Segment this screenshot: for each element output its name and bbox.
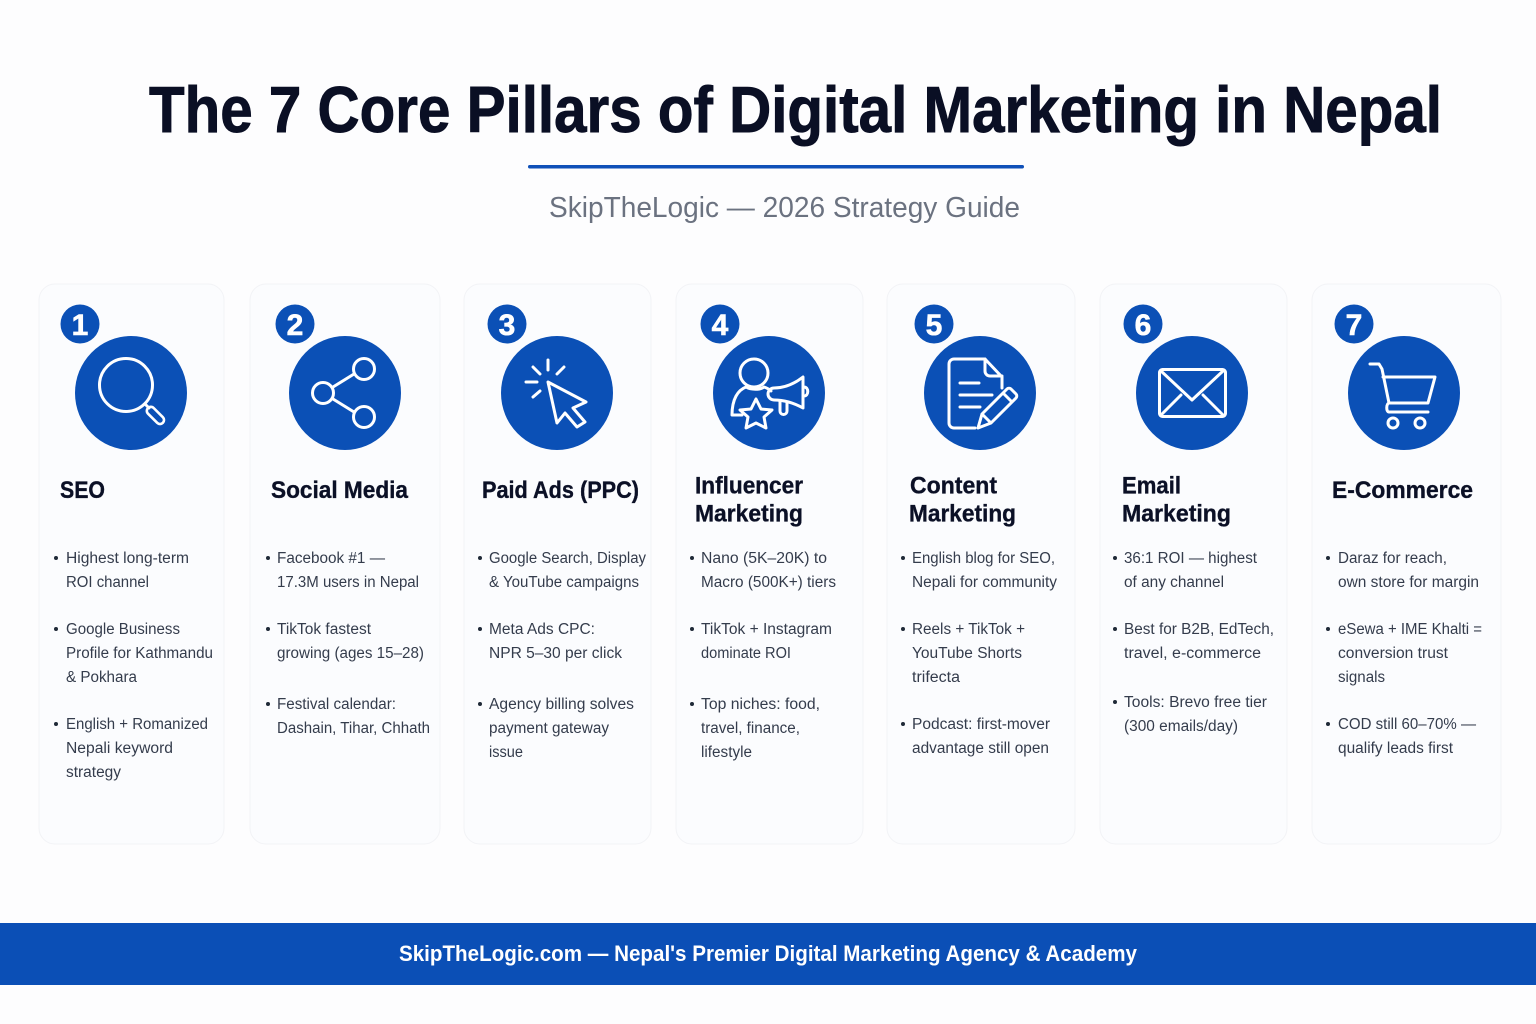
bullet list: Content Marketing bbox=[901, 550, 1057, 757]
heading: Content Marketing bbox=[909, 472, 1016, 528]
heading: Content Marketing: Content bbox=[910, 472, 997, 500]
bullet list: Content Marketing: YouTube Shorts bbox=[912, 645, 1022, 662]
badge: 6 bbox=[1124, 304, 1162, 344]
badge: 1: 1 bbox=[72, 309, 88, 342]
bullet list: Content Marketing: Podcast: first-mover bbox=[912, 716, 1050, 733]
bullet list: Social Media: Festival calendar: bbox=[277, 696, 396, 713]
bullet list: SEO: strategy bbox=[66, 764, 121, 781]
badge: 5: 5 bbox=[926, 309, 942, 342]
title underline bbox=[528, 165, 1024, 168]
heading: Email Marketing: Email bbox=[1122, 472, 1181, 500]
panel: Influencer Marketing bbox=[676, 284, 863, 844]
bullet list: Influencer Marketing: dominate ROI bbox=[701, 645, 791, 662]
bullet list: Paid Ads: issue bbox=[489, 744, 523, 761]
icon: influencer with megaphone and star bbox=[713, 336, 825, 450]
bullet list: E-Commerce: eSewa + IME Khalti = bbox=[1338, 621, 1482, 638]
panel: Paid Ads bbox=[464, 284, 651, 844]
bullet list: SEO: Google Business bbox=[66, 621, 180, 638]
bullet list: Email Marketing: Tools: Brevo free tier bbox=[1124, 694, 1267, 711]
bullet list: Influencer Marketing: TikTok + Instagram bbox=[701, 621, 832, 638]
bullet list: Email Marketing bbox=[1113, 550, 1274, 735]
bullet list: Content Marketing: English blog for SEO, bbox=[912, 550, 1055, 567]
badge: 1 bbox=[60, 304, 100, 344]
bullet list: E-Commerce bbox=[1326, 550, 1482, 757]
bullet list: Email Marketing: (300 emails/day) bbox=[1124, 718, 1238, 735]
heading: Influencer Marketing: Marketing bbox=[695, 500, 803, 528]
heading: SEO: SEO bbox=[60, 477, 105, 504]
heading: Content Marketing: Marketing bbox=[909, 500, 1016, 528]
bullet list: Social Media: Facebook #1 — bbox=[277, 550, 385, 567]
bullet list: Social Media: Dashain, Tihar, Chhath bbox=[277, 720, 430, 737]
bullet list: Influencer Marketing: Nano (5K–20K) to bbox=[701, 550, 827, 567]
bullet list: Content Marketing: advantage still open bbox=[912, 740, 1049, 757]
badge: 2 bbox=[276, 304, 314, 344]
bullet list: Paid Ads bbox=[478, 550, 646, 761]
bullet list: SEO: & Pokhara bbox=[66, 669, 137, 686]
bullet list: Social Media: 17.3M users in Nepal bbox=[277, 574, 419, 591]
badge: 5 bbox=[914, 304, 954, 344]
bullet list: E-Commerce: signals bbox=[1338, 669, 1385, 686]
icon: shopping cart bbox=[1348, 336, 1460, 450]
heading: Email Marketing bbox=[1122, 472, 1231, 528]
subtitle: SkipTheLogic — 2026 Strategy Guide bbox=[549, 192, 1020, 224]
bullet list: SEO bbox=[54, 550, 213, 781]
badge: 7 bbox=[1334, 304, 1374, 344]
bullet list: Content Marketing: Nepali for community bbox=[912, 574, 1057, 591]
heading: Influencer Marketing: Influencer bbox=[695, 472, 803, 500]
bullet list: Influencer Marketing: Top niches: food, bbox=[701, 696, 820, 713]
heading: E-Commerce: E-Commerce bbox=[1332, 477, 1473, 504]
bullet list: E-Commerce: Daraz for reach, bbox=[1338, 550, 1447, 567]
heading: Social Media: Social Media bbox=[271, 477, 409, 504]
bullet list: Paid Ads: Meta Ads CPC: bbox=[489, 621, 595, 638]
bullet list: Social Media: growing (ages 15–28) bbox=[277, 645, 424, 662]
bullet list: Influencer Marketing bbox=[690, 550, 836, 761]
panel: E-Commerce bbox=[1312, 284, 1501, 844]
bullet list: E-Commerce: own store for margin bbox=[1338, 574, 1479, 591]
panel: Social Media bbox=[250, 284, 440, 844]
footer text: SkipTheLogic.com — Nepal's Premier Digital Marketing Agency & Academy bbox=[399, 941, 1138, 966]
bullet list: Email Marketing: travel, e-commerce bbox=[1124, 645, 1261, 662]
icon: cursor click bbox=[501, 336, 613, 450]
bullet list: SEO: Nepali keyword bbox=[66, 740, 173, 757]
badge: 3 bbox=[488, 304, 526, 344]
bullet list: Influencer Marketing: Macro (500K+) tiers bbox=[701, 574, 836, 591]
bullet list: Influencer Marketing: travel, finance, bbox=[701, 720, 800, 737]
badge: 7: 7 bbox=[1346, 309, 1362, 342]
bullet list: SEO: ROI channel bbox=[66, 574, 149, 591]
bullet list: Influencer Marketing: lifestyle bbox=[701, 744, 752, 761]
heading: Paid Ads (PPC): Paid Ads (PPC) bbox=[482, 477, 639, 504]
bullet list: Content Marketing: trifecta bbox=[912, 669, 960, 686]
bullet list: SEO: Highest long-term bbox=[66, 550, 189, 567]
heading: Influencer Marketing bbox=[695, 472, 803, 528]
bullet list: Social Media bbox=[266, 550, 430, 737]
icon: envelope bbox=[1136, 336, 1248, 450]
bullet list: Email Marketing: 36:1 ROI — highest bbox=[1124, 550, 1258, 567]
footer banner bbox=[0, 923, 1536, 985]
panel: SEO bbox=[39, 284, 224, 844]
badge: 4 bbox=[700, 304, 740, 344]
bullet list: Social Media: TikTok fastest bbox=[277, 621, 372, 638]
badge: 6: 6 bbox=[1135, 309, 1151, 342]
bullet list: Paid Ads: payment gateway bbox=[489, 720, 609, 737]
bullet list: Content Marketing: Reels + TikTok + bbox=[912, 621, 1025, 638]
panel: Content Marketing bbox=[887, 284, 1075, 844]
badge: 4: 4 bbox=[712, 309, 729, 342]
bullet list: SEO: Profile for Kathmandu bbox=[66, 645, 213, 662]
icon: magnifying glass bbox=[75, 336, 187, 450]
bullet list: E-Commerce: qualify leads first bbox=[1338, 740, 1454, 757]
bullet list: Paid Ads: Agency billing solves bbox=[489, 696, 634, 713]
bullet list: Paid Ads: Google Search, Display bbox=[489, 550, 646, 567]
icon: share bbox=[289, 336, 401, 450]
bullet list: Email Marketing: of any channel bbox=[1124, 574, 1224, 591]
bullet list: E-Commerce: conversion trust bbox=[1338, 645, 1449, 662]
bullet list: Paid Ads: & YouTube campaigns bbox=[489, 574, 639, 591]
bullet list: E-Commerce: COD still 60–70% — bbox=[1338, 716, 1476, 733]
icon: document and pencil bbox=[924, 336, 1036, 450]
bullet list: Paid Ads: NPR 5–30 per click bbox=[489, 645, 622, 662]
heading: Email Marketing: Marketing bbox=[1122, 500, 1231, 528]
badge: 3: 3 bbox=[499, 309, 515, 342]
panel: Email Marketing bbox=[1100, 284, 1287, 844]
bullet list: Email Marketing: Best for B2B, EdTech, bbox=[1124, 621, 1274, 638]
bullet list: SEO: English + Romanized bbox=[66, 716, 208, 733]
badge: 2: 2 bbox=[287, 309, 303, 342]
